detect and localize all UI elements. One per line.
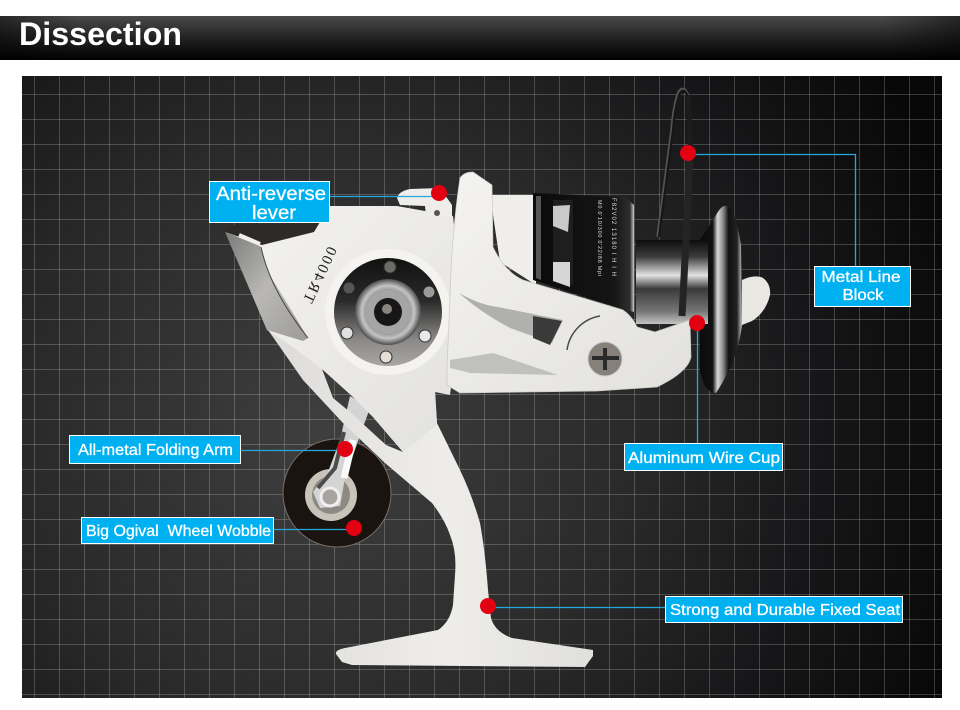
anti-reverse lever (397, 188, 452, 216)
title: Dissection (19, 16, 182, 52)
header bar (0, 16, 960, 60)
label: Anti-reverse lever: Anti-reverse (216, 184, 326, 205)
label: Strong and Durable Fixed Seat (666, 596, 902, 622)
spool shaft (636, 240, 708, 324)
spool (533, 193, 634, 312)
label: Metal Line Block: Block (842, 287, 885, 304)
leg, foot and strut (268, 330, 593, 667)
label: All-metal Folding Arm: All-metal Folding Arm (78, 442, 233, 459)
knob (742, 276, 770, 325)
marker dots (337, 145, 705, 614)
side plate (225, 222, 320, 341)
spool text line 2: F82V02 13180 I H I H (610, 198, 616, 276)
label: Anti-reverse lever (210, 182, 330, 224)
flange (700, 206, 742, 393)
handle wheel (283, 439, 391, 547)
label: Strong and Durable Fixed Seat: Strong and Durable Fixed Seat (670, 602, 901, 619)
leader lines (241, 154, 856, 608)
label: Metal Line Block: Metal Line (822, 269, 901, 286)
label: Aluminum Wire Cup (624, 444, 782, 470)
spool text: M0.0'10/300 0'22/88 Mpi (596, 200, 602, 276)
illustration: spinning reel (225, 89, 770, 667)
hub (325, 249, 451, 375)
model text: TR4000 (299, 244, 339, 305)
body housing (226, 206, 462, 452)
label: Aluminum Wire Cup: Aluminum Wire Cup (628, 450, 780, 467)
label: Metal Line Block (814, 266, 910, 306)
folding arm (313, 396, 370, 508)
label: All-metal Folding Arm (70, 436, 240, 464)
bail pivot (567, 316, 622, 376)
label: Anti-reverse lever: lever (252, 203, 297, 224)
white cover behind spool (490, 195, 536, 285)
label: Big Ogival Wheel Wobble: Big Ogival Wheel Wobble (86, 523, 271, 540)
bail wire (658, 89, 691, 316)
rotor openings (450, 293, 563, 375)
rotor arm (447, 172, 691, 393)
label: Big Ogival Wheel Wobble (82, 518, 274, 544)
